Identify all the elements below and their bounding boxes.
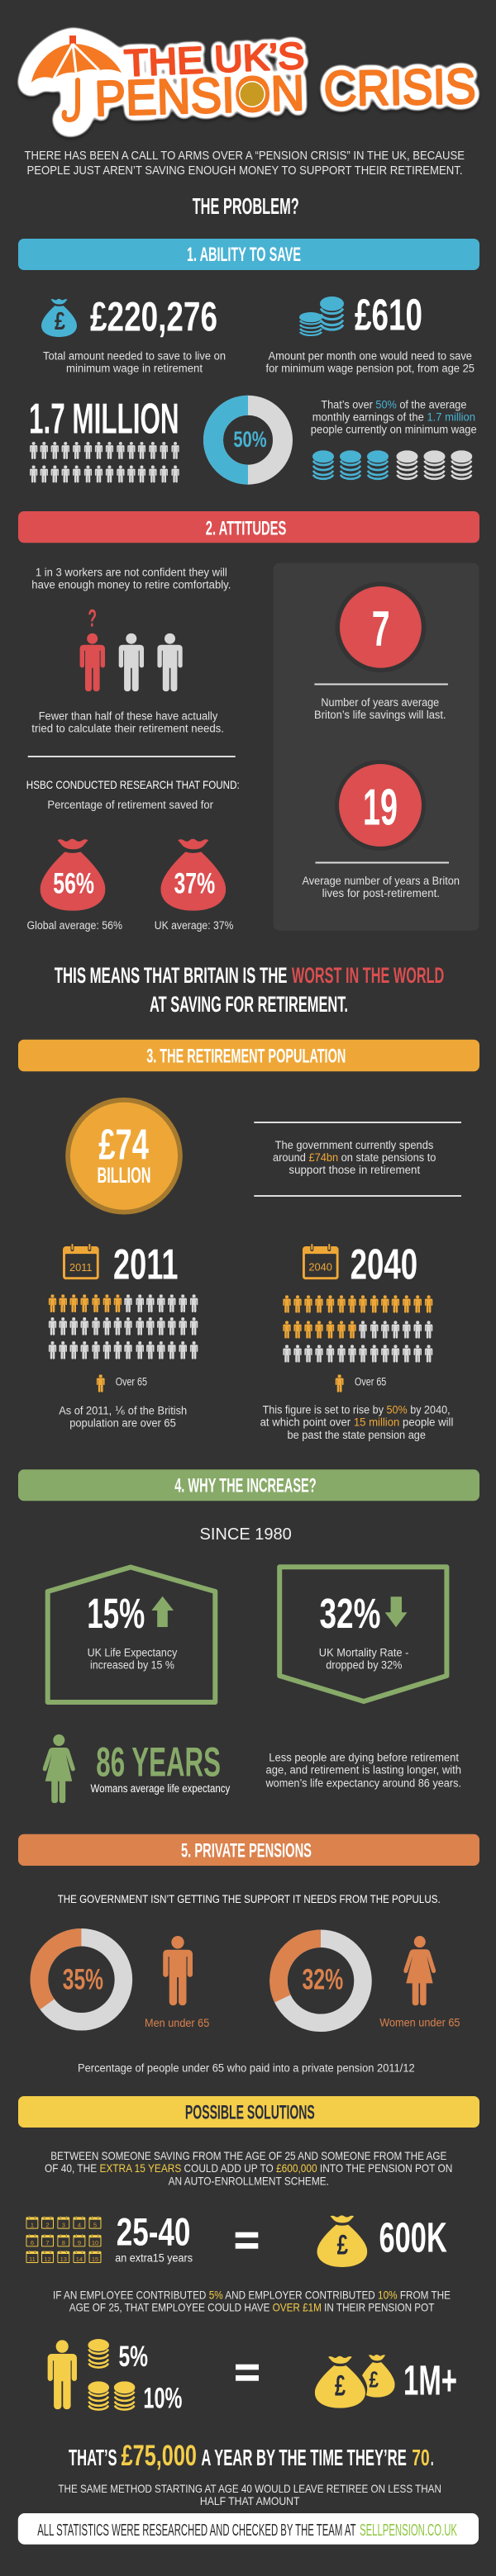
section bar 4: 4. WHY THE INCREASE? — [174, 1475, 317, 1497]
icon: up arrow — [151, 1596, 174, 1627]
text: employee contributed: IF AN EMPLOYEE CONTRIBUTED 5% AND EMPLOYER CONTRIBUTED 10% FROM THE — [53, 2289, 451, 2302]
callout: 75,000 a year: THAT’S — [69, 2445, 117, 2470]
panel: why the increase — [43, 1525, 461, 1803]
panel: private pensions — [39, 1892, 460, 2075]
icon: woman — [403, 1936, 436, 2005]
pictogram: fifteen calendars: 9 — [78, 2239, 81, 2246]
text: 1 in 3 workers: have enough money to retire comfortably. — [31, 578, 231, 591]
pictogram: six coin stacks — [312, 450, 472, 479]
card: life expectancy: increased by 15 % — [90, 1658, 174, 1671]
text: percentage saved: Percentage of retirement saved for — [47, 799, 213, 811]
text: as of 2011 — [59, 1405, 187, 1430]
section bar: possible solutions — [18, 2096, 479, 2128]
text: over 50%: monthly earnings of the 1.7 million — [312, 410, 475, 423]
text: as of 2011: As of 2011, ⅙ of the British — [59, 1405, 187, 1417]
pictogram: people rows — [30, 442, 179, 482]
donut chart: 50% — [213, 406, 283, 475]
section bar 2: 2. ATTITUDES — [206, 517, 286, 539]
stat: 610: £610 — [355, 290, 422, 339]
label: uk average: UK average: 37% — [155, 919, 233, 932]
caption: amount per month: for minimum wage pension pot, from age 25 — [266, 362, 475, 374]
pictogram: fifteen calendars: 5 — [93, 2222, 97, 2228]
icon: two money bags — [313, 2355, 395, 2411]
pictogram: fifteen calendars: 10 — [92, 2239, 98, 2246]
icon: calendar 2011 — [63, 1244, 99, 1279]
pictogram: fifteen calendars: 6 — [31, 2239, 34, 2246]
caption: amount per month — [266, 350, 475, 374]
text: over 50%: people currently on minimum wage — [311, 423, 477, 435]
label: men under 65: Men under 65 — [145, 2017, 209, 2029]
caption: years post-retirement: Average number of years a Briton — [303, 875, 460, 887]
icon: man — [163, 1936, 193, 2005]
callout: worst in the world: AT SAVING FOR RETIREMENT. — [150, 992, 348, 1017]
text: same method: HALF THAT AMOUNT — [200, 2494, 300, 2507]
callout: 75,000 a year — [69, 2440, 433, 2472]
heading: the problem: THE PROBLEM? — [193, 193, 299, 219]
stat circle: 74 billion: £74 — [98, 1121, 149, 1169]
text: 1 in 3 workers — [31, 566, 231, 591]
section bar 1 — [18, 239, 479, 270]
icon: two money bags: £ — [369, 2367, 379, 2393]
icon: bag 37%: 37% — [174, 868, 215, 900]
icon: money bag yellow — [317, 2215, 367, 2267]
panel: possible solutions: . — [431, 2445, 433, 2470]
stat: 25-40: 25-40 — [117, 2209, 190, 2253]
callout: worst in the world: THIS MEANS THAT BRITAIN IS THE — [55, 963, 288, 988]
stat: 1m+: 1M+ — [403, 2356, 457, 2403]
caption: years post-retirement — [303, 875, 460, 899]
callout: 75,000 a year: £75,000 — [122, 2440, 197, 2472]
pictogram: fifteen calendars: 8 — [62, 2239, 65, 2246]
text: as of 2011: population are over 65 — [69, 1417, 176, 1430]
text: extra 15 years — [45, 2149, 452, 2187]
icon: money bag blue: £ — [55, 306, 65, 335]
heading: 2040: 2040 — [351, 1241, 417, 1288]
pictogram: 2040 population — [283, 1295, 432, 1363]
section bar 3 — [18, 1040, 479, 1071]
pictogram: fifteen calendars: 13 — [60, 2256, 67, 2263]
text: less people dying: age, and retirement is lasting longer, with — [266, 1764, 461, 1777]
icon: umbrella — [31, 36, 122, 120]
panel: retirement population — [49, 1098, 461, 1441]
donut chart: women 32%: 32% — [303, 1963, 343, 1995]
icon: two money bags: £ — [335, 2370, 346, 2403]
legend: over 65 (2011): Over 65 — [116, 1376, 147, 1388]
text: over 50%: That’s over 50% of the average — [321, 398, 466, 410]
donut chart: men 35%: 35% — [63, 1963, 103, 1995]
heading: hsbc: HSBC CONDUCTED RESEARCH THAT FOUND: — [26, 778, 240, 791]
icon: coin stacks 10% — [88, 2381, 135, 2410]
card: life expectancy: 15% — [87, 1590, 145, 1637]
title: crisis: CRISIS — [323, 59, 476, 116]
section bar 5 — [18, 1834, 479, 1866]
section bar 5: 5. PRIVATE PENSIONS — [181, 1839, 312, 1862]
pictogram: 2011 population — [49, 1294, 198, 1359]
stat: 600k: 600K — [379, 2214, 447, 2261]
panel: attitudes left — [26, 566, 240, 932]
stat circle: 19 — [335, 760, 426, 851]
callout: worst in the world — [55, 963, 444, 1017]
text: extra 15 years: AN AUTO-ENROLLMENT SCHEME. — [169, 2174, 329, 2187]
caption: womans life expectancy: Womans average life expectancy — [91, 1782, 230, 1795]
caption: an extra 15 years: an extra15 years — [115, 2251, 193, 2264]
section bar: possible solutions: POSSIBLE SOLUTIONS — [185, 2102, 315, 2124]
label: global average: Global average: 56% — [26, 919, 122, 932]
pictogram: fifteen calendars — [26, 2216, 101, 2263]
icon: down arrow — [385, 1596, 407, 1627]
stat circle: 7 — [335, 581, 426, 672]
heading: since 1980: SINCE 1980 — [200, 1525, 292, 1544]
section bar 1: 1. ABILITY TO SAVE — [187, 244, 301, 266]
pictogram: fifteen calendars: 2 — [45, 2222, 50, 2228]
legend: over 65 (2040): Over 65 — [355, 1376, 386, 1388]
section bar 3: 3. THE RETIREMENT POPULATION — [146, 1046, 346, 1068]
icon: woman — [43, 1734, 75, 1803]
card: mortality rate: dropped by 32% — [326, 1658, 402, 1671]
icon: gold coin — [239, 81, 265, 107]
icon: question mark: ? — [88, 605, 97, 632]
card: mortality rate — [279, 1567, 446, 1701]
icon: bag 56%: 56% — [53, 868, 94, 900]
icon: bag 56% — [41, 839, 105, 911]
text: employee contributed — [53, 2289, 451, 2314]
caption: total amount: Total amount needed to save to live on — [43, 350, 226, 363]
title logo — [31, 35, 476, 126]
text: rise by 2040: be past the state pension age — [288, 1429, 426, 1441]
pictogram: fifteen calendars: 3 — [62, 2222, 65, 2228]
pictogram: three workers — [80, 633, 183, 691]
section bar 2 — [18, 511, 479, 543]
stat circle: 19: 19 — [363, 779, 398, 836]
pictogram: fifteen calendars: 7 — [45, 2239, 50, 2246]
donut chart: women 32% — [279, 1938, 363, 2023]
panel: ability to save — [29, 290, 477, 482]
donut chart: men 35% — [39, 1938, 123, 2022]
pictogram: fifteen calendars: 4 — [78, 2222, 81, 2228]
stat: 1.7 million: 1.7 MILLION — [29, 395, 179, 443]
text: fewer than half — [31, 710, 224, 735]
caption: years savings last — [314, 696, 446, 721]
icon: bag 37% — [160, 839, 226, 911]
caption: total amount — [43, 350, 226, 374]
text: 1 in 3 workers: 1 in 3 workers are not confident they will — [36, 566, 227, 578]
text: government spends — [254, 1122, 461, 1197]
pictogram: fifteen calendars: 11 — [29, 2256, 36, 2263]
pictogram: fifteen calendars: 1 — [31, 2222, 34, 2228]
caption: years post-retirement: lives for post-retirement. — [322, 887, 440, 899]
icon: employee — [48, 2340, 77, 2409]
stat: 220,276: £220,276 — [90, 294, 217, 340]
donut chart: 50%: 50% — [233, 427, 267, 452]
icon: equals sign — [236, 2365, 259, 2381]
text: government spends: The government currently spends — [275, 1139, 434, 1151]
icon: equals sign — [236, 2232, 258, 2249]
text: less people dying: Less people are dying before retirement — [269, 1752, 459, 1764]
text: same method — [58, 2482, 441, 2507]
card: mortality rate: UK Mortality Rate - — [319, 1646, 408, 1658]
text: fewer than half: Fewer than half of these have actually — [39, 710, 218, 723]
icon: coin stacks — [299, 297, 344, 335]
pictogram: fifteen calendars: 15 — [92, 2256, 98, 2263]
title: the uk's: THE UK’S — [123, 35, 305, 84]
text: less people dying: women’s life expectancy around 86 years. — [265, 1777, 461, 1789]
card: life expectancy: UK Life Expectancy — [88, 1646, 178, 1658]
text: rise by 2040: This figure is set to rise by 50% by 2040, — [263, 1404, 451, 1416]
label: women under 65: Women under 65 — [379, 2016, 460, 2028]
section bar 4 — [18, 1469, 479, 1501]
heading: 2011: 2011 — [113, 1241, 179, 1288]
text: less people dying — [265, 1752, 461, 1789]
icon: money bag blue — [41, 299, 77, 337]
panel: attitudes right — [274, 563, 479, 931]
title: pension: PENSION — [93, 65, 305, 126]
caption: years savings last: Briton’s life savings will last. — [314, 709, 446, 721]
caption: percentage of people: Percentage of people under 65 who paid into a private pension 2011/12 — [78, 2062, 415, 2075]
icon: calendar 2011: 2011 — [69, 1261, 93, 1274]
legend: over 65 (2011) — [97, 1374, 147, 1392]
caption: years savings last: Number of years average — [321, 696, 439, 709]
text: extra 15 years: OF 40, THE EXTRA 15 YEARS COULD ADD UP TO £600,000 INTO THE PENSION POT ON — [45, 2161, 452, 2175]
stat: 5%: 5% — [119, 2341, 148, 2373]
footer: source bar — [18, 2513, 479, 2545]
intro text — [25, 149, 465, 178]
caption: total amount: minimum wage in retirement — [66, 362, 203, 374]
icon: calendar 2040 — [303, 1244, 339, 1279]
text: over 50% — [311, 398, 477, 435]
stat: 86 years: 86 YEARS — [96, 1739, 221, 1786]
callout: 75,000 a year: 70 — [412, 2445, 430, 2470]
text: employee contributed: AGE OF 25, THAT EMPLOYEE COULD HAVE OVER £1M IN THEIR PENSION POT — [69, 2301, 435, 2314]
stat circle: 74 billion — [65, 1098, 183, 1214]
icon: calendar 2040: 2040 — [308, 1260, 332, 1274]
card: mortality rate: 32% — [319, 1590, 380, 1637]
icon: coin stack 5% — [88, 2339, 109, 2368]
pictogram: fifteen calendars: 12 — [44, 2256, 51, 2263]
stat: 10%: 10% — [143, 2382, 182, 2414]
text: government spends: around £74bn on state pensions to — [273, 1151, 436, 1164]
stat circle: 74 billion: BILLION — [98, 1163, 150, 1188]
pictogram: fifteen calendars: 14 — [76, 2256, 83, 2263]
text: rise by 2040: at which point over 15 million people will — [260, 1416, 453, 1429]
stat circle: 7: 7 — [372, 601, 390, 657]
text: rise by 2040 — [260, 1404, 453, 1441]
text: fewer than half: tried to calculate their retirement needs. — [31, 723, 224, 735]
panel: possible solutions — [26, 2149, 457, 2507]
legend: over 65 (2040) — [336, 1374, 386, 1392]
icon: money bag yellow: £ — [337, 2229, 348, 2261]
text: government spends: support those in retirement — [289, 1164, 420, 1176]
caption: amount per month: Amount per month one would need to save — [268, 350, 472, 363]
card: life expectancy — [48, 1568, 215, 1702]
